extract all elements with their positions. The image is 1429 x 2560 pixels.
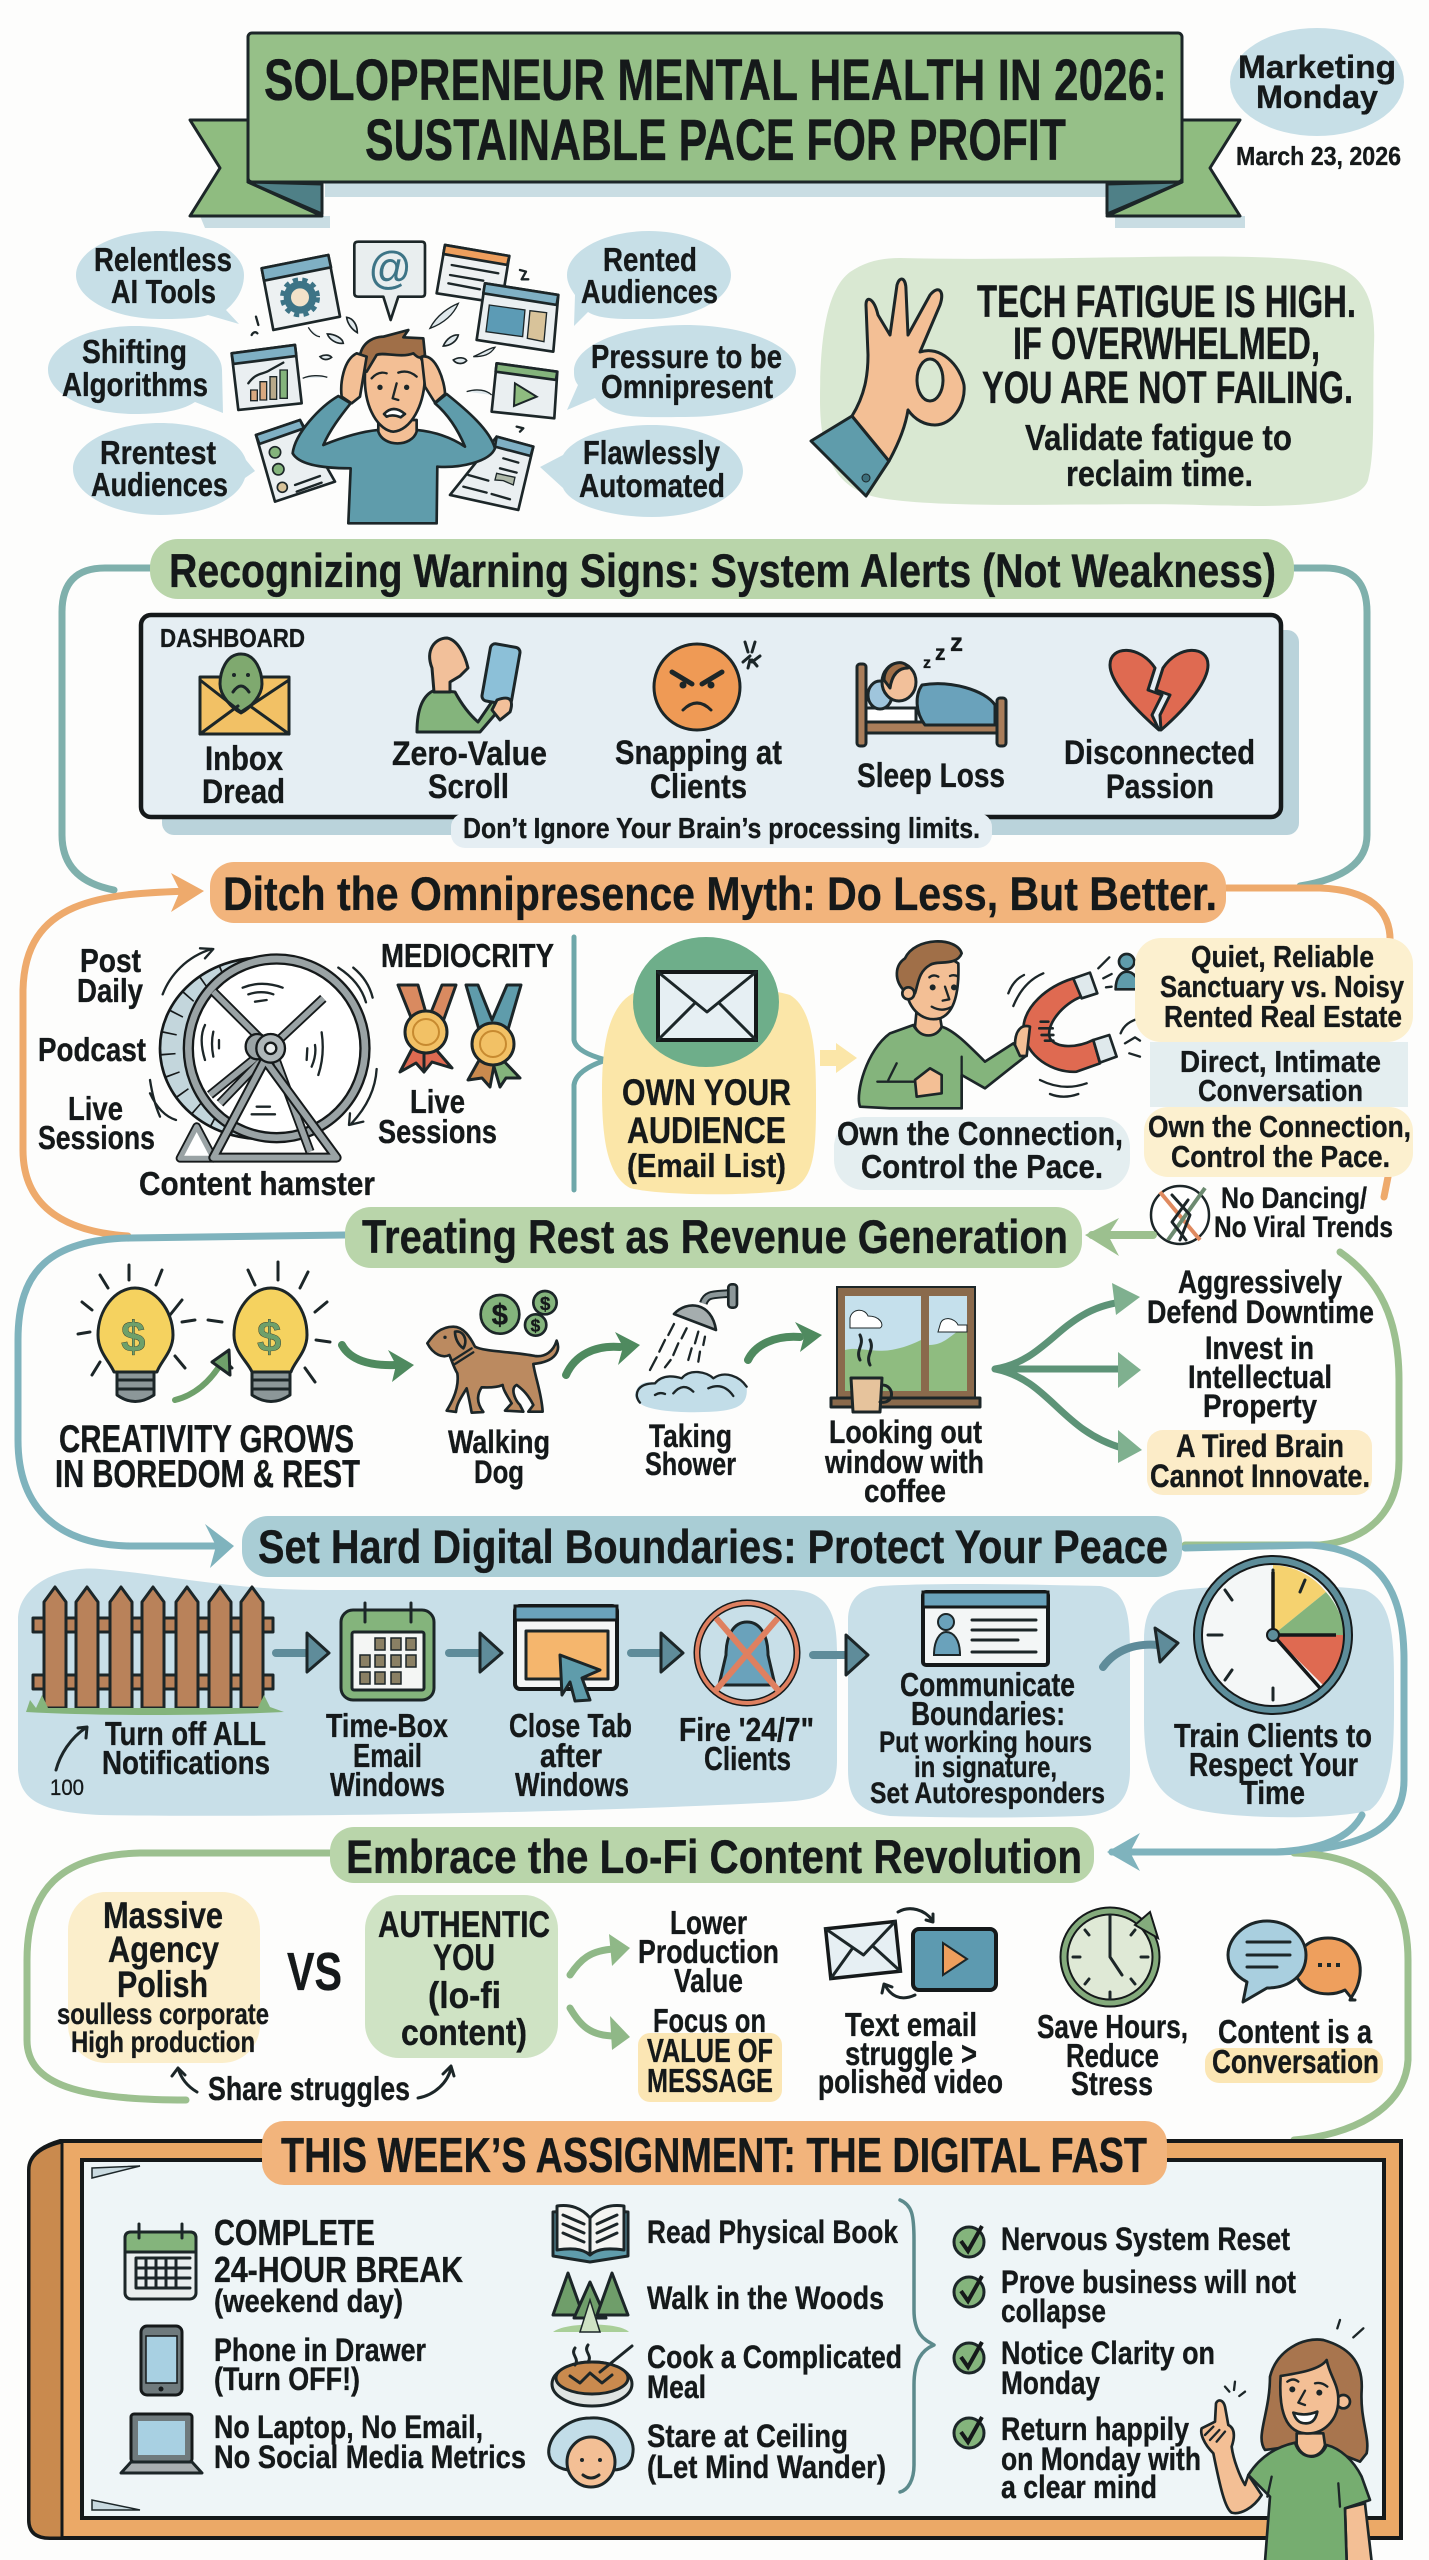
label: text email: struggle > [845,2035,977,2072]
icon: crossed bell [697,1603,797,1703]
check: prove business [954,2264,1296,2329]
label: walking dog: Walking [448,1424,550,1460]
icon: phone [141,2326,182,2395]
icon: zero-value scroll [417,638,521,732]
icon: dog with coins: $ [531,1316,541,1336]
bubble: Relentless AI Tools [76,231,244,324]
text: read book: Read Physical Book [647,2214,898,2250]
text: cook: Cook a Complicated [647,2339,902,2375]
connector: rest section border [18,1218,1399,1568]
panel: assignment board [29,2121,1401,2538]
icon: email to video [826,1909,996,1998]
bubble: Rented Audiences: Rented [603,241,697,278]
labels: content list: Sessions [38,1119,155,1156]
labels: content list: Podcast [38,1031,146,1068]
text: 24-hour break: COMPLETE [214,2212,375,2253]
label: close tab: Close Tab [509,1707,632,1744]
list: focus on value: VALUE OF [647,2032,773,2069]
icon: green clock [1064,1911,1158,2003]
title banner: SUSTAINABLE PACE FOR PROFIT [365,108,1066,173]
label: fire clients [679,1711,814,1777]
list: outcomes: Aggressively [1178,1264,1342,1300]
panel: communicate boundaries: in signature, [914,1751,1057,1784]
panel: own your audience: OWN YOUR [622,1072,791,1113]
section heading: rest: Treating Rest as Revenue Generation [362,1210,1068,1263]
bubble: Flawlessly Automated: Automated [579,467,725,504]
icon: medals [398,985,521,1087]
note: no dancing [1151,1182,1393,1244]
icon: window with coffee [831,1287,980,1412]
label: snapping at clients: Clients [650,768,747,806]
list: outcomes: Intellectual [1188,1359,1332,1395]
heading: digital fast [262,2121,1167,2185]
label: taking shower [645,1418,736,1482]
section heading: omnipresence: Ditch the Omnipresence Myth: Do Less, But Better. [223,867,1217,920]
panel: authentic you: (lo-fi [428,1975,501,2016]
label: creativity grows: CREATIVITY GROWS [59,1418,354,1461]
text: stare at ceiling [647,2418,886,2485]
text: 24-hour break: (weekend day) [214,2283,403,2319]
callout: own the connection: Control the Pace. [861,1148,1103,1185]
bubble: Rrentest Audiences [73,423,255,515]
label: content is a conversation [1205,2013,1383,2083]
arrow [449,1633,502,1672]
icon: bowl [552,2345,632,2406]
label: close tab [509,1707,632,1803]
check: notice clarity: Notice Clarity on [1001,2335,1215,2371]
text: phone in drawer: Phone in Drawer [214,2332,426,2368]
figure [293,330,495,523]
panel: agency polish: Agency [108,1929,219,1970]
badge: Marketing Monday [1230,28,1404,136]
icon: chat bubbles [1228,1921,1360,2002]
stress marks [252,270,528,432]
labels: content list: Daily [77,972,144,1009]
check: return happily: a clear mind [1001,2469,1157,2505]
bubble: Relentless AI Tools: AI Tools [111,273,216,310]
panel: hamster wheel [38,937,554,1202]
label: live sessions: Sessions [378,1113,497,1150]
text: cook: Meal [647,2369,706,2405]
label: looking out window: Looking out [829,1414,982,1450]
callout: tech fatigue: IF OVERWHELMED, [1013,318,1320,369]
icon: lightbulbs: $ [257,1313,281,1362]
bubble: Rrentest Audiences: Rrentest [100,434,216,471]
connector: boundaries border [1112,1545,1404,1852]
icon: fence [26,1587,284,1715]
label: save hours [1037,2008,1188,2102]
divider: brace [900,2200,934,2492]
label: notifications: Notifications [102,1744,270,1781]
window: chart [232,345,302,410]
icon: lightbulbs: $ [121,1313,145,1362]
panel: agency polish: soulless corporate [57,1998,269,2031]
icon: small person [1116,954,1139,989]
label: snapping at clients [615,734,782,806]
label: walking dog [448,1424,550,1490]
date: March 23, 2026 [1236,141,1401,171]
label: time-box: Windows [330,1766,445,1803]
icon: sleep loss bed [857,627,1006,746]
connector: lo-fi border [27,1815,1408,2140]
panel: agency polish [57,1892,269,2063]
panel: communicate boundaries [848,1584,1130,1818]
section heading: lo-fi: Embrace the Lo-Fi Content Revolution [346,1830,1082,1883]
panel: dashboard: DASHBOARD [160,623,305,653]
label: zero-value scroll: Zero-Value [392,735,547,773]
bubble: Rrentest Audiences: Audiences [91,466,228,503]
icon: shower [635,1284,747,1412]
bubble: Pressure to be Omnipresent: Omnipresent [601,368,773,405]
labels: content list [38,942,155,1156]
label: sleep loss: Sleep Loss [857,757,1005,795]
label: walking dog: Dog [474,1454,524,1490]
heading: digital fast: THIS WEEK’S ASSIGNMENT: THE DIGITAL FAST [281,2129,1147,2183]
panel: authentic you: content) [401,2012,527,2053]
window: layout [477,283,558,352]
text: stare at ceiling: (Let Mind Wander) [647,2449,886,2485]
label: save hours: Stress [1071,2065,1153,2102]
badge: Marketing Monday: Monday [1256,79,1378,115]
panel: creativity chain [55,1262,1374,1509]
window: gear [262,255,340,330]
window: orange article [437,245,509,303]
connector: orange section border [23,873,1390,1236]
window: play [492,363,557,418]
label: snapping at clients: Snapping at [615,734,782,772]
arrows: fork [995,1283,1142,1463]
overwhelm bubbles [48,231,796,517]
panel: own your audience: AUDIENCE [627,1110,786,1151]
figure: smiling woman pointing up [1201,2320,1372,2560]
labels: content list: Live [68,1090,123,1127]
icon: open book [553,2206,628,2262]
icon: browser with cursor [515,1606,617,1701]
panel: communicate boundaries: Put working hours [879,1726,1092,1759]
list: lower production: Value [674,1962,743,1999]
label: notifications: Turn off ALL [105,1715,266,1752]
label: zero-value scroll: Scroll [428,768,509,806]
list: lower production: Lower [670,1904,747,1941]
list: outcomes [1147,1264,1374,1495]
icon: dog with coins [427,1291,558,1413]
box: direct conversation: Conversation [1198,1073,1363,1108]
label: VS: VS [287,1942,342,2002]
text: no laptop: No Laptop, No Email, [214,2409,483,2445]
connector: teal section border [62,568,1367,890]
icon: trees [553,2273,629,2332]
label: live sessions: Live [410,1083,465,1120]
icon: mind wander head [549,2418,633,2487]
badge: Marketing Monday: Marketing [1238,49,1396,85]
highlight: tired brain: Cannot Innovate. [1150,1458,1370,1494]
callout: tech fatigue [811,257,1374,506]
check: notice clarity [954,2335,1215,2401]
icon: magnet [1023,978,1100,1072]
panel: communicate boundaries: Set Autoresponders [870,1777,1105,1810]
icon: calendar [125,2224,196,2299]
check: notice clarity: Monday [1001,2365,1100,2401]
arrow [1103,1628,1178,1667]
panel: train clients: Train Clients to [1174,1717,1372,1754]
icon: lightbulbs [78,1262,330,1402]
bubble: Flawlessly Automated [540,425,743,517]
icon: small arrow and count: 100 [50,1775,84,1800]
arrow [631,1633,683,1672]
bubble: Pressure to be Omnipresent [567,325,796,417]
label: looking out window: window with [824,1444,984,1480]
window: list left [256,420,335,502]
bubble: at sign: @ [368,242,412,293]
panel: agency polish: Polish [117,1964,208,2005]
label: content is a conversation: Content is a [1218,2013,1373,2050]
label: inbox dread [202,740,285,811]
highlight: tired brain [1147,1428,1372,1495]
icon: hamster wheel [150,948,377,1158]
check: prove business: Prove business will not [1001,2264,1296,2300]
callout: tech fatigue: reclaim time. [1066,453,1253,494]
label: creativity grows [55,1418,360,1496]
box: quiet sanctuary [1135,938,1413,1042]
label: inbox dread: Dread [202,773,285,811]
icon: sleep loss bed: z [935,642,946,665]
labels: content list: Post [80,942,141,979]
panel: agency polish: Massive [103,1895,223,1936]
list: focus on value [638,2002,782,2102]
icon: sleep loss bed: z [923,655,931,672]
bubble: Relentless AI Tools: Relentless [94,241,232,278]
text: cook [647,2339,902,2405]
icon: small arrow and count [50,1727,87,1800]
arrow [276,1633,329,1672]
text: no laptop [214,2409,526,2475]
check: return happily: Return happily [1001,2411,1189,2447]
label: time-box [326,1707,449,1803]
icon: dog with coins: $ [492,1299,508,1332]
label: content is a conversation: Conversation [1212,2043,1379,2080]
panel: own your audience: (Email List) [627,1147,786,1184]
label: text email: Text email [845,2006,977,2043]
bubble: Pressure to be Omnipresent: Pressure to be [591,338,782,375]
label: text email: polished video [818,2063,1003,2100]
highlight: tired brain: A Tired Brain [1176,1428,1344,1464]
label: disconnected passion [1064,734,1255,806]
note: no dancing: No Dancing/ [1221,1182,1368,1215]
panel: sanctuary benefits [1135,938,1413,1177]
label: text email [818,2006,1003,2100]
label: save hours: Reduce [1066,2037,1159,2074]
title banner [190,33,1245,228]
label: disconnected passion: Passion [1106,768,1214,806]
check: return happily [954,2411,1201,2505]
arrows: production and focus [570,1934,630,2050]
callout: tech fatigue: Validate fatigue to [1025,417,1292,458]
list: outcomes: Invest in [1205,1330,1314,1366]
bubble: Flawlessly Automated: Flawlessly [583,434,721,471]
icon: angry face [654,642,760,730]
stressed person with floating app windows [232,242,558,523]
list: outcomes: Defend Downtime [1147,1294,1374,1330]
label: save hours: Save Hours, [1037,2008,1188,2045]
panel: train clients [1144,1560,1394,1817]
label: looking out window [824,1414,984,1509]
list: focus on value: Focus on [653,2002,766,2039]
check: return happily: on Monday with [1001,2441,1201,2477]
bubble: Shifting Algorithms: Algorithms [62,366,208,403]
panel: authentic you: YOU [433,1937,495,1978]
panel: train clients: Time [1241,1774,1305,1811]
panel: own your audience [602,937,857,1194]
text: stare at ceiling: Stare at Ceiling [647,2418,848,2454]
panel: agency polish: High production [71,2026,255,2059]
label: notifications [102,1715,270,1781]
panel: train clients: Respect Your [1189,1746,1358,1783]
label: creativity grows: IN BOREDOM & REST [55,1453,360,1496]
text: 24-hour break [214,2212,463,2319]
title banner: SOLOPRENEUR MENTAL HEALTH IN 2026: [264,48,1167,113]
label: close tab: after [540,1737,602,1774]
icon: person with magnet [859,941,1140,1108]
icon: laptop [121,2414,202,2473]
text: phone in drawer: (Turn OFF!) [214,2361,360,2397]
arrow [813,1635,868,1675]
label: looking out window: coffee [864,1473,946,1509]
icon: calendar [341,1603,434,1700]
label: fire clients: Fire '24/7" [679,1711,814,1748]
list: benefits [954,2221,1296,2505]
callout: own the connection: Own the Connection, [837,1115,1123,1152]
label: taking shower: Shower [645,1446,736,1482]
list: lower production [638,1904,779,1999]
label: time-box: Time-Box [326,1707,449,1744]
box: control the pace [1144,1107,1413,1177]
box: quiet sanctuary: Quiet, Reliable [1191,939,1374,974]
list: focus on value: MESSAGE [647,2062,773,2099]
icon: inbox dread [200,654,289,734]
text: phone in drawer [214,2332,426,2397]
label: inbox dread: Inbox [205,740,283,778]
bubble: Shifting Algorithms: Shifting [82,333,187,370]
check: prove business: collapse [1001,2293,1106,2329]
panel: dashboard [141,615,1299,848]
label: fire clients: Clients [704,1740,791,1777]
section heading: boundaries: Set Hard Digital Boundaries: Protect Your Peace [258,1520,1168,1573]
bubble: Shifting Algorithms [48,326,223,414]
text: walk: Walk in the Woods [647,2280,884,2316]
arrow [748,1322,822,1360]
callout: processing limits: Don’t Ignore Your Brain’s processing limits. [463,813,980,845]
check: nervous system: Nervous System Reset [1001,2221,1290,2257]
list: outcomes: Property [1203,1388,1317,1424]
window: list right [450,437,533,510]
icon: clock [1198,1560,1348,1710]
bubble: Rented Audiences: Audiences [581,273,718,310]
icon: sleep loss bed: z [950,627,963,657]
panel: boundary steps [18,1568,837,1816]
note: share struggles: Share struggles [208,2070,410,2107]
label: live sessions [378,1083,497,1150]
arrow [820,1043,857,1073]
icon: email [633,937,779,1067]
icon: signature window [923,1592,1048,1665]
panel: authentic you: AUTHENTIC [378,1904,550,1945]
label: time-box: Email [353,1737,422,1774]
callout: own the connection [834,1115,1130,1190]
icon: OK hand [811,279,964,496]
label: taking shower: Taking [649,1418,732,1454]
text: 24-hour break: 24-HOUR BREAK [214,2249,463,2290]
icon: broken heart [1110,650,1208,730]
arrow [566,1332,640,1375]
icon: dog with coins: $ [540,1293,551,1314]
box: direct conversation: Direct, Intimate [1180,1044,1381,1079]
panel: authentic you [365,1895,558,2058]
label: mediocrity: MEDIOCRITY [381,937,554,974]
label: content hamster: Content hamster [139,1165,375,1202]
arrow [342,1345,414,1382]
bubble: at sign [354,242,425,320]
label: close tab: Windows [515,1766,629,1803]
box: control the pace: Control the Pace. [1171,1139,1390,1174]
note: no dancing: No Viral Trends [1214,1211,1393,1244]
divider: brace [574,937,606,1190]
panel: communicate boundaries: Boundaries: [911,1695,1065,1732]
list: lower production: Production [638,1933,779,1970]
panel: communicate boundaries: Communicate [900,1666,1075,1703]
label: disconnected passion: Disconnected [1064,734,1255,772]
text: no laptop: No Social Media Metrics [214,2439,526,2475]
box: direct conversation [1150,1042,1408,1108]
bubble: Rented Audiences [567,231,731,326]
label: zero-value scroll [392,735,547,806]
